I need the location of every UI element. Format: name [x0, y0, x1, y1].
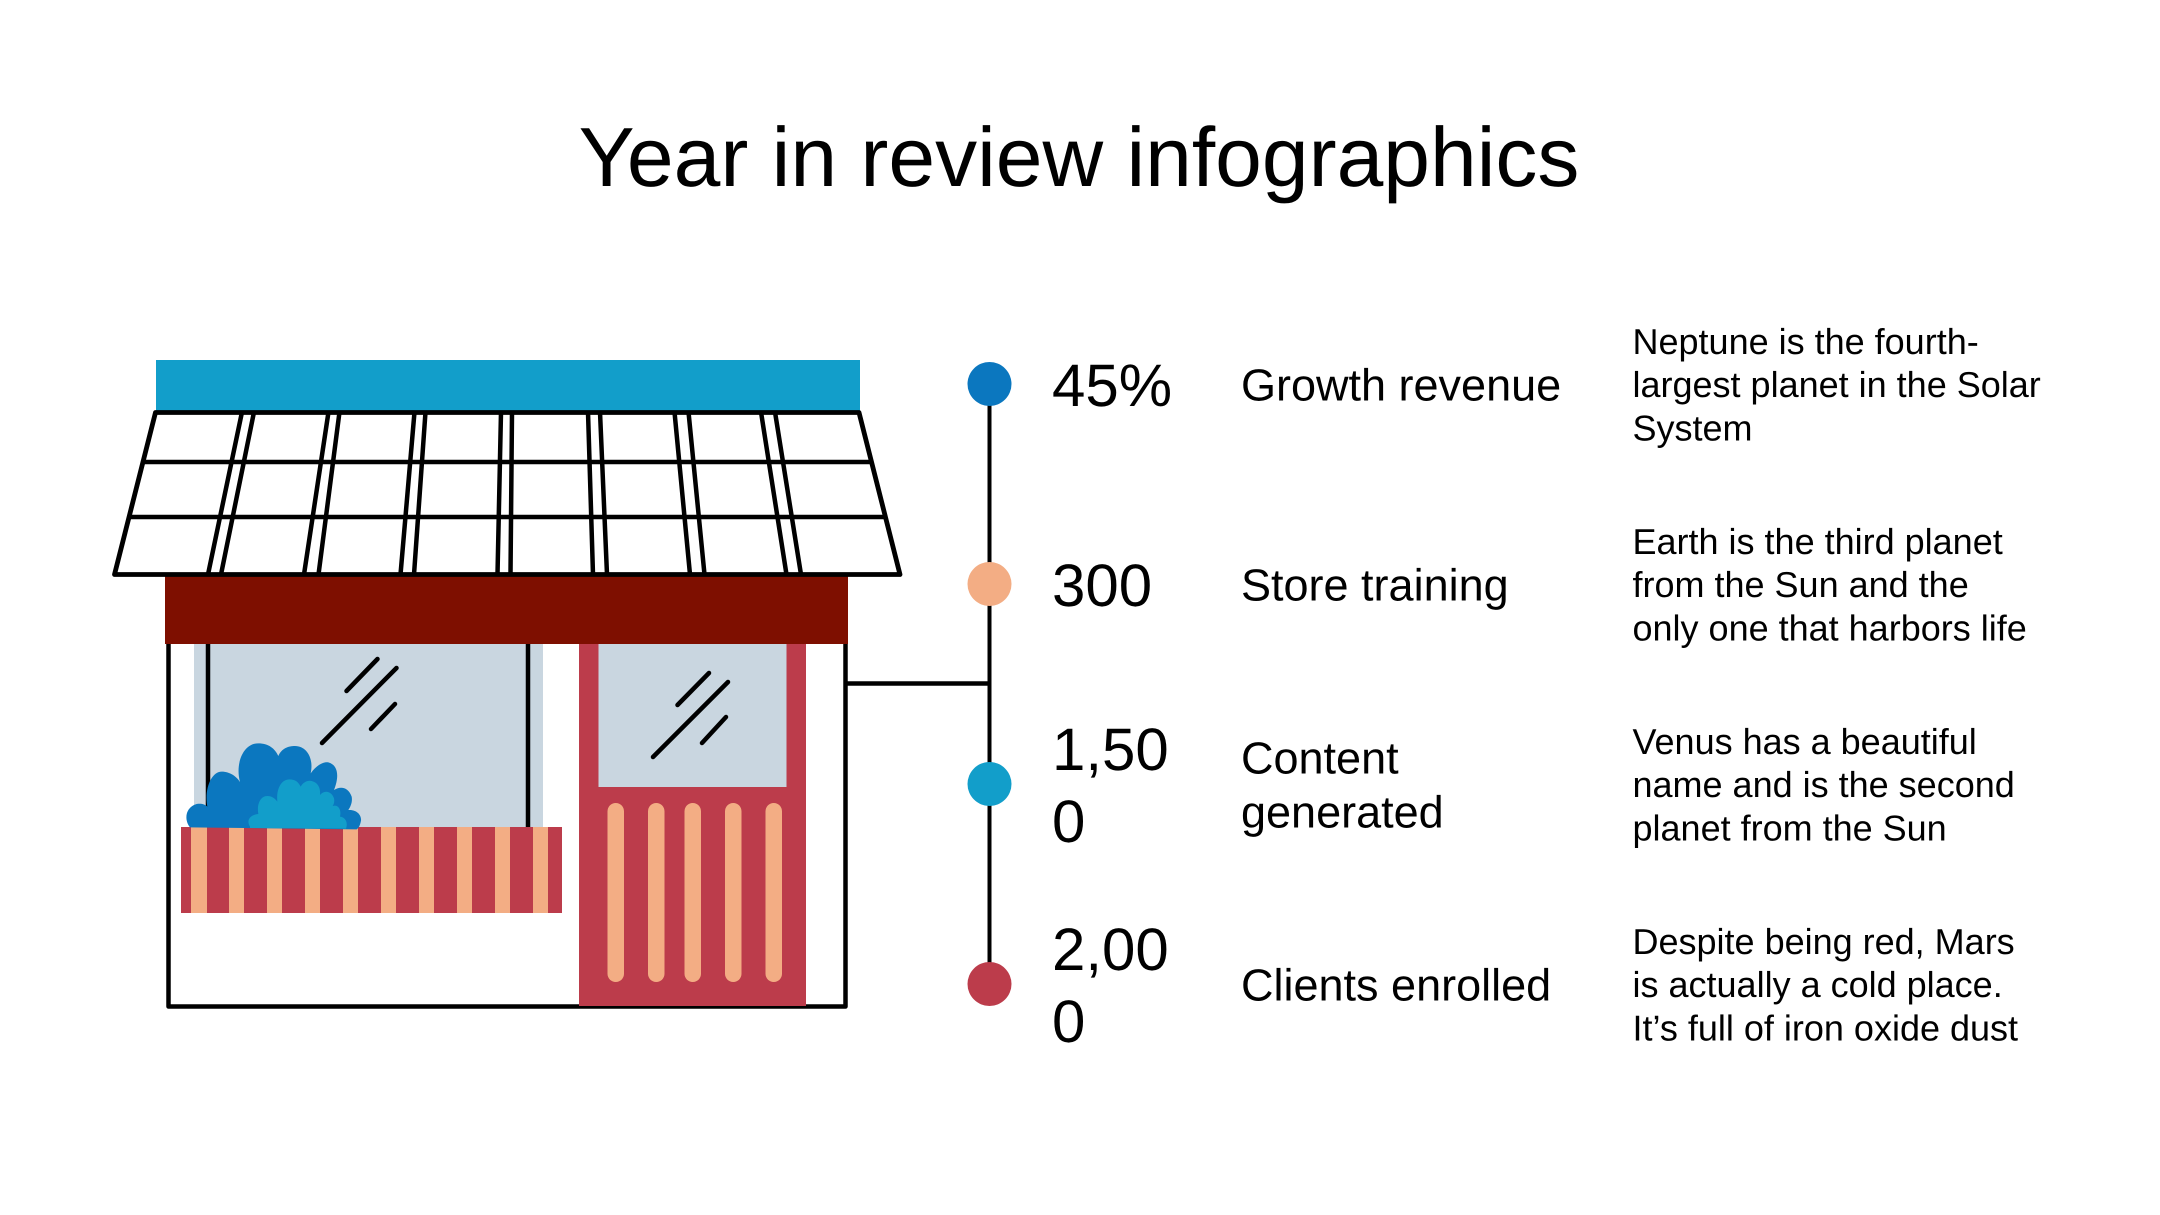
value: 2,000: 0 [1052, 988, 1085, 1055]
illustration: storefront [114, 360, 900, 1006]
timeline line [988, 384, 992, 984]
row: clients enrolled [968, 916, 2018, 1055]
description: Neptune: Neptune is the fourth- [1632, 321, 1979, 362]
door [579, 644, 806, 1006]
label: clients enrolled: Clients enrolled [1241, 960, 1551, 1010]
value: 2,000: 2,00 [1052, 916, 1169, 983]
dot: peach [968, 562, 1012, 606]
description: Mars: is actually a cold place. [1632, 964, 2003, 1005]
description: Earth: only one that harbors life [1632, 608, 2027, 648]
title: Year in review infographics [579, 110, 1579, 204]
dot: blue [968, 362, 1012, 406]
label: content generated: generated [1241, 786, 1444, 838]
tiled roof [114, 412, 900, 574]
description: Earth: Earth is the third planet [1632, 521, 2003, 562]
bush [186, 743, 361, 829]
row: store training [968, 521, 2027, 648]
label: growth revenue: Growth revenue [1241, 360, 1561, 410]
dot: light blue [968, 762, 1012, 806]
striped planter [181, 827, 562, 913]
rooftop band [156, 360, 860, 411]
row: content generated [968, 716, 2015, 855]
description: Venus: name and is the second [1632, 764, 2015, 805]
value: 1,500: 1,50 [1052, 716, 1169, 783]
description: Mars: It’s full of iron oxide dust [1632, 1008, 2018, 1048]
description: Venus: planet from the Sun [1632, 808, 1947, 848]
label: content generated: Content [1241, 732, 1399, 784]
value: 45%: 45% [1052, 352, 1172, 419]
description: Venus: Venus has a beautiful [1632, 721, 1977, 762]
value: 1,500: 0 [1052, 788, 1085, 855]
description: Neptune: System [1632, 408, 1753, 448]
shop window [194, 644, 543, 827]
description: Neptune: largest planet in the Solar [1632, 364, 2041, 405]
connector line [846, 681, 989, 686]
description: Mars: Despite being red, Mars [1632, 921, 2015, 962]
building wall outline [168, 644, 846, 1006]
label: store training: Store training [1241, 560, 1509, 610]
dot: red [968, 962, 1012, 1006]
fascia band [165, 575, 848, 644]
value: 300: 300 [1052, 552, 1152, 619]
description: Earth: from the Sun and the [1632, 564, 1969, 605]
row: growth revenue [968, 321, 2041, 448]
